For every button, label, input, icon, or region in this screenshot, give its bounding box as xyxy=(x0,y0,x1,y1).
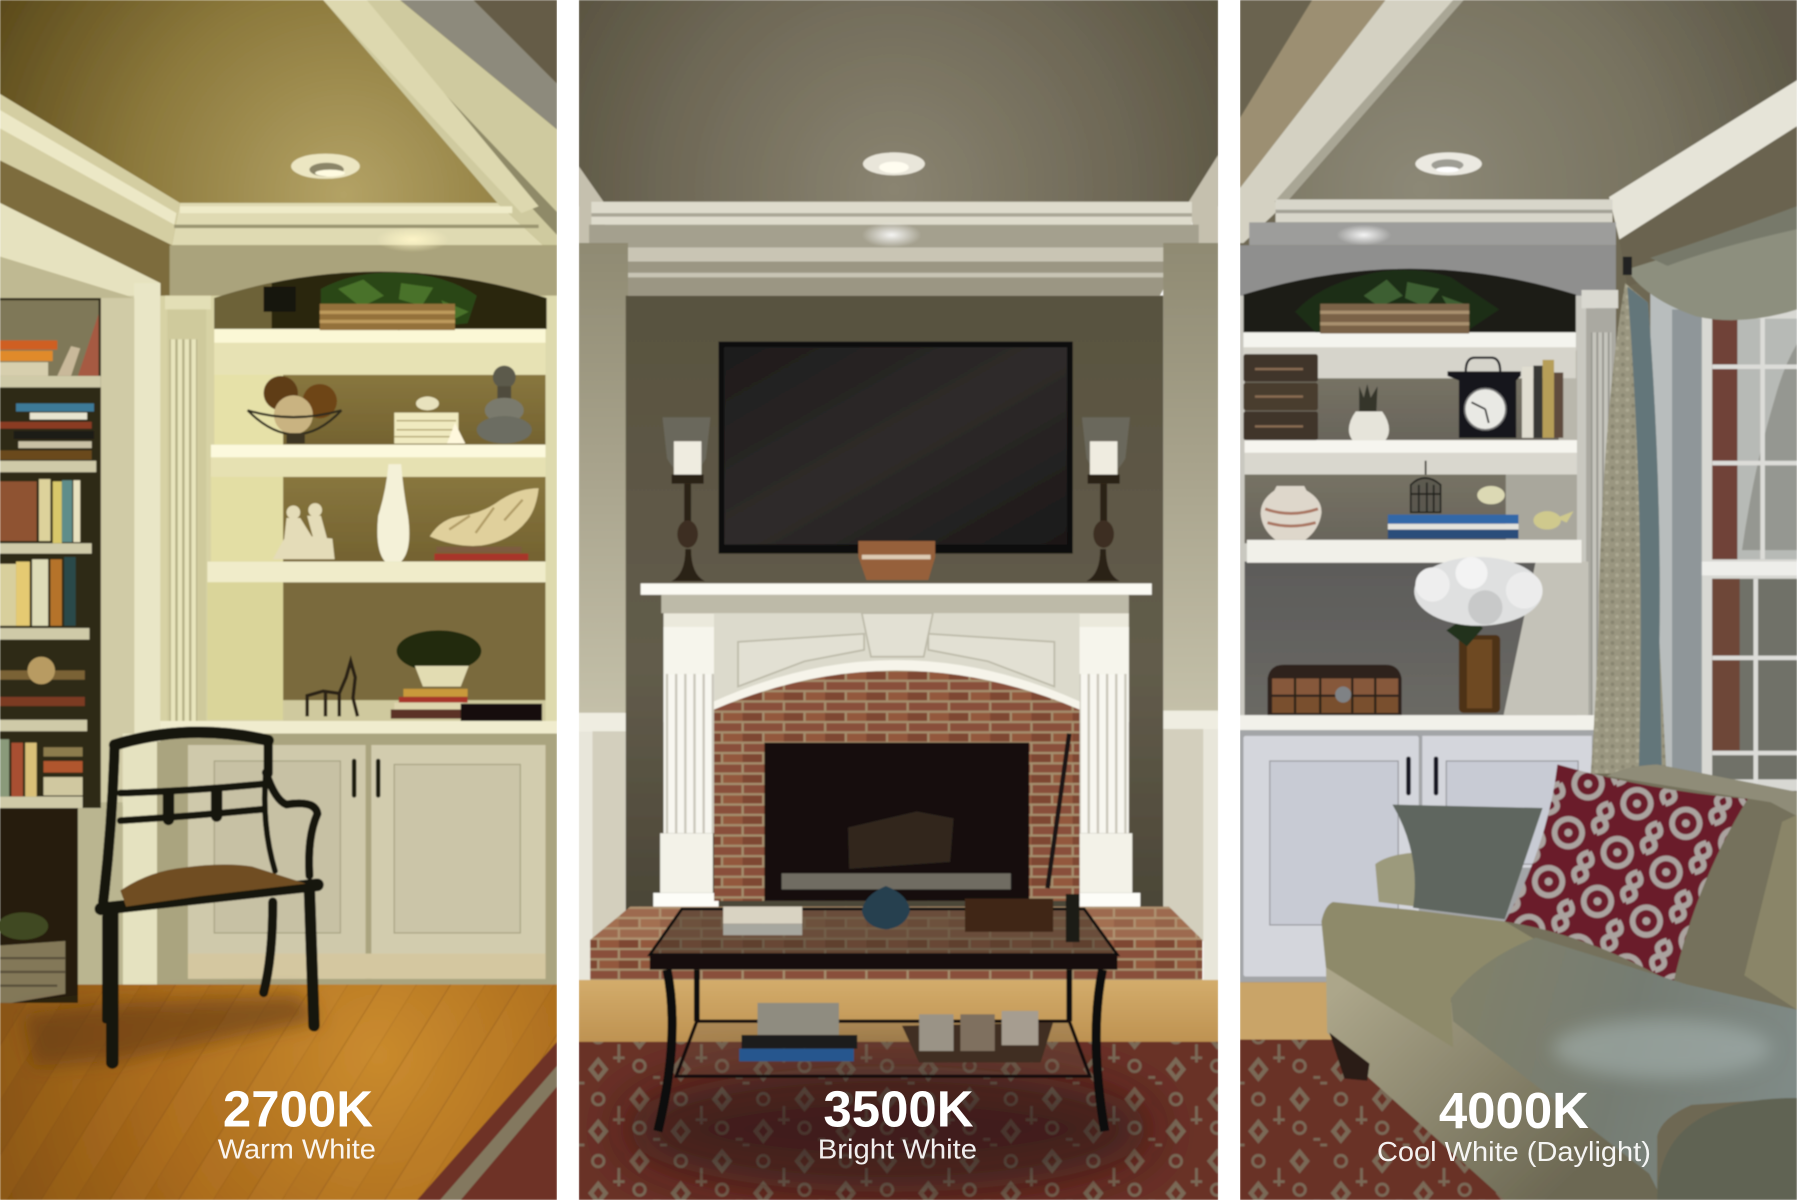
pilaster right xyxy=(1582,290,1618,767)
hearth xyxy=(590,907,1202,980)
icon: coral and magazines xyxy=(430,488,539,560)
icon: ceramic urn xyxy=(1261,486,1321,540)
pilaster xyxy=(165,294,211,721)
icon: small horse sculpture xyxy=(307,661,358,716)
fireplace surround xyxy=(641,583,1152,918)
ceiling light xyxy=(1415,152,1482,175)
coffee table xyxy=(650,909,1117,1131)
ceiling light xyxy=(863,152,925,175)
icon: top basket with plant xyxy=(320,273,477,330)
ceiling beam xyxy=(1240,0,1464,243)
panel: 4000K cool white room xyxy=(1240,0,1797,1200)
icon: birdcage xyxy=(1411,461,1441,512)
table top objects xyxy=(723,886,1080,942)
sofa back xyxy=(1505,764,1797,1100)
TV xyxy=(719,342,1073,554)
arch panel xyxy=(168,244,557,298)
bookcase body xyxy=(1240,296,1595,731)
rug shadow under table xyxy=(625,1066,1152,1192)
panel: 3500K bright white room xyxy=(579,0,1218,1200)
sofa xyxy=(1321,764,1797,1200)
icon: mantel clock xyxy=(1447,358,1521,438)
fire tool xyxy=(1047,734,1069,888)
arch panel xyxy=(1240,245,1616,314)
icon: flowers in vase xyxy=(1414,557,1543,713)
table lower shelf objects xyxy=(739,1003,1053,1062)
crown molding horizontal xyxy=(1249,199,1616,245)
icon: white vase xyxy=(377,464,409,562)
icon: upright books xyxy=(1522,360,1563,438)
crown molding horizontal xyxy=(172,203,543,245)
wall under right crown xyxy=(1619,126,1797,287)
grey pillow xyxy=(1392,805,1543,919)
left candle holder xyxy=(662,417,711,581)
chair shadow xyxy=(23,995,321,1066)
red damask pillow xyxy=(1505,764,1748,983)
far right cushion xyxy=(1744,815,1797,1010)
side walls xyxy=(579,243,1218,986)
ceiling xyxy=(579,0,1218,206)
corner beams xyxy=(579,166,605,243)
ceiling beam xyxy=(323,0,557,245)
ceiling light xyxy=(291,154,360,179)
icon: small potted plant xyxy=(1349,384,1389,440)
upper right dark ceiling xyxy=(473,0,557,84)
floor xyxy=(1240,982,1378,1042)
curtain swag xyxy=(1623,206,1797,320)
upper left ceiling xyxy=(1240,0,1312,118)
wall base warm xyxy=(1,1,557,984)
label: 4000K cool white daylight: Cool White (Daylight) xyxy=(1377,1136,1651,1167)
wall background xyxy=(1240,0,1797,1200)
side panels xyxy=(1506,474,1577,541)
shelves xyxy=(1240,332,1594,730)
dark zone with basket below bookcase xyxy=(0,808,78,1003)
ceiling xyxy=(0,0,504,203)
label: 3500K bright white xyxy=(818,1081,977,1165)
lower shelf surface xyxy=(284,702,544,720)
icon: wire bowl with spheres xyxy=(248,376,342,444)
shelves xyxy=(154,329,557,734)
icon: books and birds xyxy=(1388,486,1574,539)
icon: shrub in planter with books xyxy=(391,630,542,721)
bookcase cabinet body xyxy=(160,296,557,743)
right seat cushion xyxy=(1451,938,1797,1190)
right lower cushion xyxy=(1657,1098,1797,1200)
sofa foot xyxy=(1329,1033,1370,1081)
crown molding left xyxy=(0,94,180,245)
floor xyxy=(0,985,557,1200)
icon: stacked suitcases xyxy=(1243,354,1318,440)
curtain xyxy=(1591,283,1666,774)
left bookcase with books xyxy=(0,298,101,808)
cabinet doors xyxy=(1240,730,1594,982)
mantel box ornament xyxy=(858,541,935,580)
shelf side panels xyxy=(214,375,284,444)
icon: stacked books and bird xyxy=(394,397,465,444)
crown molding xyxy=(589,202,1199,296)
left seat cushion xyxy=(1321,902,1536,1048)
icon: basket with plant xyxy=(1295,270,1499,334)
label: 4000K cool white daylight: 4000K xyxy=(1439,1082,1589,1139)
rug xyxy=(1240,1040,1538,1200)
arched niche xyxy=(1243,269,1576,332)
icon: seated figures statue xyxy=(273,503,335,559)
label: 3500K bright white: 3500K xyxy=(823,1081,974,1138)
panel: 2700K warm white room xyxy=(0,0,557,1200)
icon: wooden chest xyxy=(1268,665,1402,715)
chair leopard seat xyxy=(120,864,306,907)
firebox xyxy=(764,743,1029,901)
label: 2700K warm white: Warm White xyxy=(218,1134,376,1165)
niche wall xyxy=(626,296,1163,915)
brick firebox surround xyxy=(714,670,1080,901)
rug xyxy=(579,1042,1218,1200)
wall left above door xyxy=(1,162,168,246)
floor xyxy=(579,980,1218,1044)
window xyxy=(1650,275,1797,791)
cabinet doors xyxy=(154,734,557,988)
label: 2700K warm white: 2700K xyxy=(223,1081,373,1138)
label: 2700K warm white xyxy=(218,1081,376,1165)
shelf back walls xyxy=(283,375,546,447)
label: 3500K bright white: Bright White xyxy=(818,1134,977,1165)
rug corner xyxy=(417,1042,557,1200)
label: 4000K cool white daylight xyxy=(1377,1082,1651,1167)
icon: grey glass bottle xyxy=(477,366,532,444)
arm xyxy=(1375,853,1417,907)
shelf back walls xyxy=(1245,378,1577,442)
door casing xyxy=(0,203,160,1002)
sofa base xyxy=(1326,967,1672,1200)
crown molding right xyxy=(1609,80,1797,240)
chair xyxy=(101,732,317,1062)
right candle holder xyxy=(1082,417,1130,581)
ceiling xyxy=(1240,0,1797,199)
arched niche xyxy=(214,272,547,329)
